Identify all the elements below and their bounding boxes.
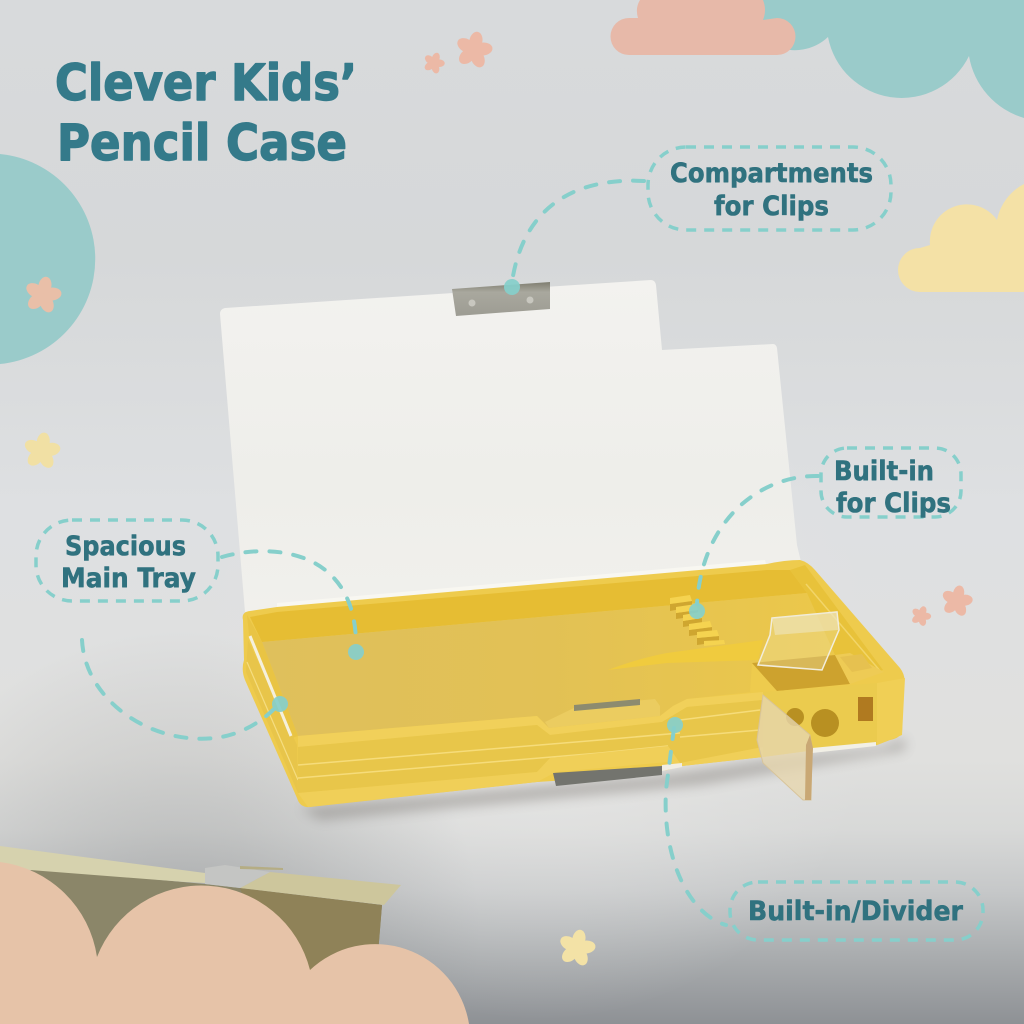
callout connectors bbox=[82, 181, 818, 925]
tray back wall bbox=[250, 570, 807, 642]
icon: flower right large bbox=[937, 582, 977, 620]
callout: built-in for clips: for Clips bbox=[836, 488, 951, 519]
case shadow bbox=[300, 738, 905, 820]
tray outer body bbox=[243, 560, 905, 807]
callout: spacious main tray: Main Tray bbox=[61, 563, 196, 594]
cardboard box in background bbox=[0, 846, 401, 990]
underside white strip bbox=[812, 742, 876, 753]
right end cap bbox=[877, 678, 905, 745]
open white lid bbox=[220, 280, 802, 612]
callout dots bbox=[272, 279, 705, 733]
tray floor bbox=[262, 593, 835, 736]
lid hinge strip bbox=[277, 560, 767, 611]
icon: flower top large bbox=[451, 28, 497, 72]
left inner wall bbox=[247, 615, 298, 738]
icon: flower top small bbox=[420, 49, 448, 77]
front ridges bbox=[298, 710, 760, 778]
callout: compartments for clips: Compartments bbox=[670, 158, 873, 189]
bottom latch metal bbox=[553, 766, 662, 786]
callout: built-in divider: Built-in/Divider bbox=[748, 896, 964, 927]
lower lip bbox=[298, 746, 763, 807]
pencil case photo bbox=[220, 280, 905, 820]
icon: flower yellow left bbox=[20, 430, 64, 472]
clear flip lid upper bbox=[758, 612, 839, 670]
decorative cloud: pink top bbox=[610, 0, 796, 55]
divider steps bbox=[670, 595, 725, 646]
tray front wall bbox=[298, 700, 763, 793]
latch recess bbox=[545, 699, 660, 728]
lid clip bbox=[452, 282, 550, 316]
title bbox=[55, 54, 357, 172]
callout: built-in for clips bbox=[821, 448, 961, 519]
left outer side with white strip bbox=[246, 636, 298, 793]
callout: built-in for clips: Built-in bbox=[834, 456, 934, 487]
right inner wall bbox=[790, 565, 883, 672]
sharpener compartment bbox=[750, 653, 884, 757]
decorative cloud: peach bottom left bbox=[0, 862, 469, 1024]
callout: spacious main tray: Spacious bbox=[65, 531, 186, 562]
title: Pencil Case bbox=[57, 114, 347, 172]
decorative cloud: yellow right bbox=[898, 184, 1024, 292]
decorative cloud: teal top right bbox=[747, 0, 1024, 118]
top latch metal bbox=[574, 699, 640, 711]
callout: compartments for clips: for Clips bbox=[714, 191, 829, 222]
callout: built-in divider bbox=[730, 882, 983, 940]
icon: flower yellow bottom bbox=[554, 926, 600, 970]
clear flip lid lower bbox=[757, 695, 813, 800]
front rim bbox=[298, 692, 763, 747]
divider wedge bbox=[608, 640, 763, 670]
callout: spacious main tray bbox=[36, 520, 218, 601]
decorative circle: teal left bbox=[0, 154, 95, 364]
icon: flower right small bbox=[907, 603, 935, 629]
icon: flower on teal circle bbox=[20, 273, 66, 317]
callout: compartments for clips bbox=[648, 147, 891, 230]
title: Clever Kids’ bbox=[55, 54, 357, 112]
